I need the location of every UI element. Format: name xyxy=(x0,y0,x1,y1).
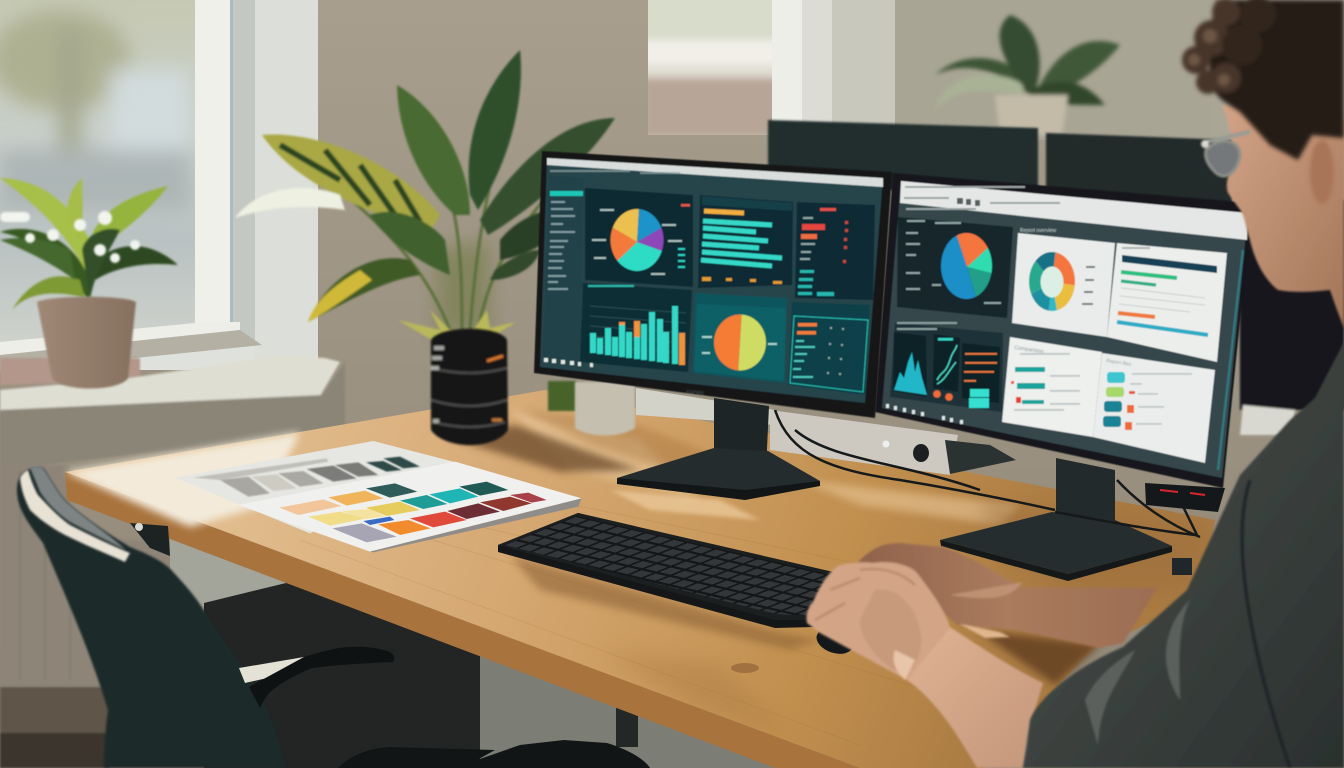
panel: text summary: Comparison xyxy=(1014,345,1044,355)
far arm and hand xyxy=(857,543,1157,648)
glasses xyxy=(1201,132,1250,176)
cables xyxy=(775,410,1200,537)
panel: donut chart xyxy=(1011,227,1116,338)
ear xyxy=(1310,140,1334,204)
seat xyxy=(338,740,650,768)
person: arms and hand xyxy=(807,543,1157,768)
terracotta pot xyxy=(37,297,136,388)
center window xyxy=(640,0,832,138)
panel: donut chart: Report overview xyxy=(1020,228,1057,234)
panel: legend chips xyxy=(1093,353,1215,463)
black lens-shaped cup xyxy=(431,329,508,445)
left window xyxy=(0,0,318,372)
computer mouse xyxy=(813,624,857,658)
left screen background xyxy=(540,158,883,403)
panel: data list xyxy=(788,302,870,395)
right screen background xyxy=(882,181,1248,478)
person: head xyxy=(1182,0,1344,328)
armrest xyxy=(239,647,394,708)
right monitor stand xyxy=(940,458,1172,581)
left screen title bar xyxy=(547,158,883,187)
color swatch papers xyxy=(175,441,582,552)
panel: text summary xyxy=(1002,337,1102,437)
right screen title bar xyxy=(900,181,1248,240)
panel: horizontal bars xyxy=(698,195,793,288)
central tropical plant xyxy=(235,50,615,345)
curly hair xyxy=(1182,0,1344,160)
desk top and front edge xyxy=(65,390,1215,768)
right screen toolbar icons xyxy=(904,186,1060,210)
near hand xyxy=(807,562,950,680)
under-desk floor and cabinet xyxy=(170,530,980,768)
panel: right screen mini charts xyxy=(886,322,1003,424)
person: shirt xyxy=(1023,342,1344,768)
left monitor logo: ASPIRE xyxy=(686,389,705,397)
panel: legend chips: Report files xyxy=(1106,358,1132,368)
background plant on right shelf xyxy=(935,15,1120,135)
left screen toolbar xyxy=(550,170,680,182)
panel: two-part pie xyxy=(693,293,790,383)
keyboard xyxy=(498,513,833,628)
window sill and wall below xyxy=(0,355,345,768)
left plant with terracotta pot xyxy=(0,178,178,388)
panel: bar chart xyxy=(580,283,692,372)
monitor right xyxy=(875,173,1252,488)
panel: right screen pie xyxy=(896,216,1014,318)
back monitors xyxy=(768,120,1344,435)
monitor left xyxy=(534,151,892,418)
panel: status list xyxy=(795,202,875,300)
left monitor stand xyxy=(617,398,820,500)
office chair xyxy=(17,466,650,768)
objects behind the monitors xyxy=(548,381,1016,475)
left screen sidebar xyxy=(543,176,593,367)
face and neck xyxy=(1222,105,1344,328)
red-lit device xyxy=(1145,483,1225,575)
panel: progress bars xyxy=(1107,243,1227,362)
panel: pie chart xyxy=(580,188,693,290)
forearm near xyxy=(907,627,1043,768)
